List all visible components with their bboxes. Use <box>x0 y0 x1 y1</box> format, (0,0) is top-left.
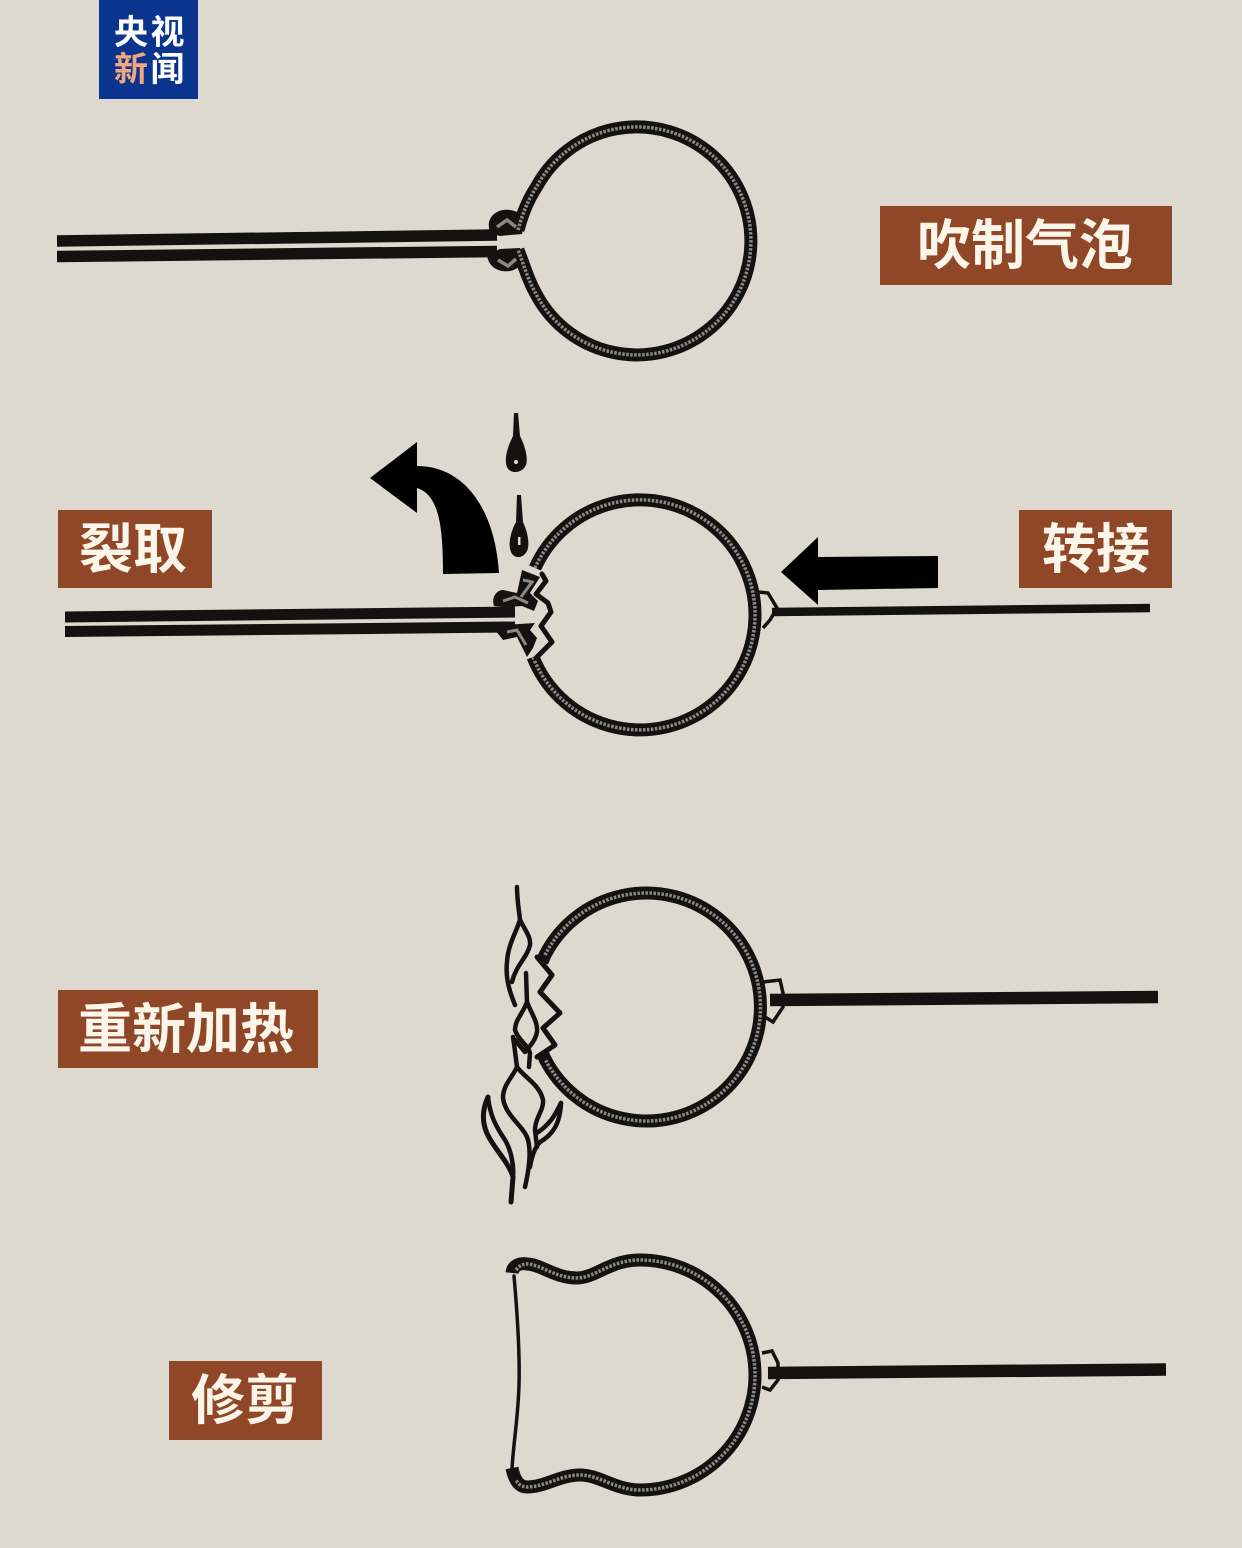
logo: CCTV news <box>99 0 198 99</box>
label: 裂取: 裂取 <box>79 520 187 580</box>
step 4 diagram: trimmed open vessel <box>512 1260 1166 1490</box>
label: 重新加热: 重新加热 <box>78 1000 294 1060</box>
arrow: transfer to the left <box>781 537 938 605</box>
arrow: curved lift away <box>370 442 499 574</box>
label: 吹制气泡: 吹制气泡 <box>917 216 1133 276</box>
step 3 diagram: reheating with flame <box>483 887 1158 1202</box>
step 1 diagram: blowing a bubble <box>57 127 751 355</box>
icon: flame <box>483 887 561 1202</box>
label: 吹制气泡 <box>880 206 1172 285</box>
label: 重新加热 <box>58 990 318 1068</box>
logo: CCTV news: 新 <box>114 51 148 89</box>
drops of glass <box>506 413 528 557</box>
label: 转接 <box>1019 510 1172 588</box>
logo: CCTV news: 央 <box>114 14 148 52</box>
label: 转接: 转接 <box>1042 520 1150 580</box>
label: 裂取 <box>58 510 212 588</box>
label: 修剪: 修剪 <box>191 1371 299 1431</box>
logo: CCTV news: 闻 <box>150 51 184 89</box>
step 2 diagram: cracking off and transfer <box>65 500 1150 730</box>
label: 修剪 <box>169 1361 322 1440</box>
logo: CCTV news: 视 <box>150 14 184 52</box>
